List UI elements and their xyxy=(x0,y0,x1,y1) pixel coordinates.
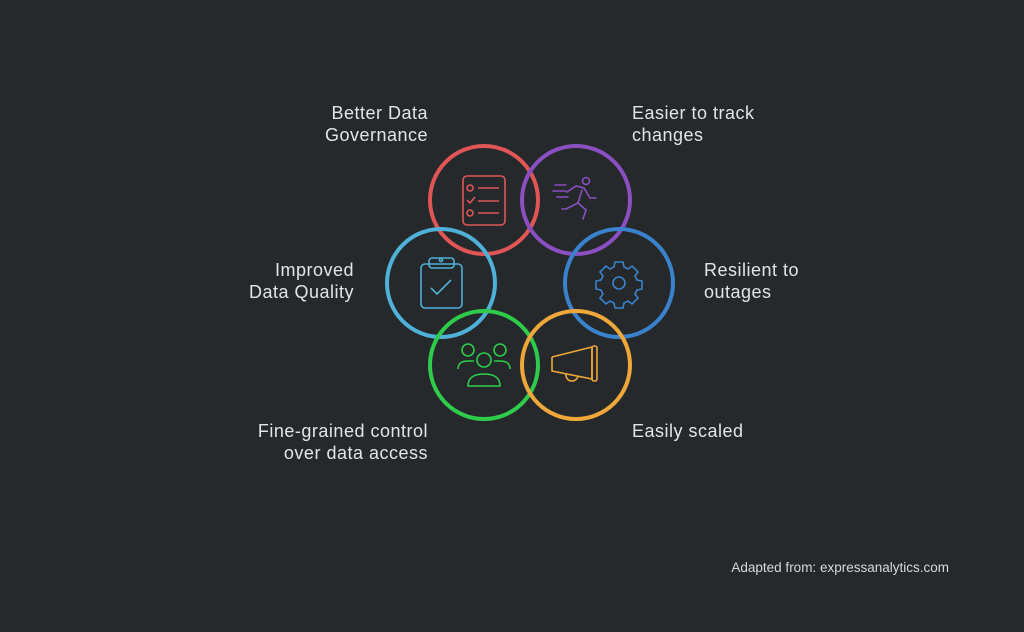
circle: orange Easily scaled xyxy=(522,311,630,419)
icon: clipboard check xyxy=(421,258,462,308)
icon: checklist xyxy=(463,176,505,225)
circle: light blue Improved Data Quality xyxy=(387,229,495,337)
circle: blue Resilient to outages xyxy=(565,229,673,337)
label: Resilient to outages: outages xyxy=(704,282,772,302)
label: Fine-grained control: Fine-grained control xyxy=(258,421,428,441)
circle: green Fine-grained control xyxy=(430,311,538,419)
label: Better Data Governance: Better Data xyxy=(331,103,428,123)
label: Improved Data Quality: Improved xyxy=(275,260,354,280)
label: Resilient to outages: Resilient to xyxy=(704,260,799,280)
label: Easier to track changes: Easier to track xyxy=(632,103,755,123)
label: Fine-grained control: over data access xyxy=(284,443,428,463)
circle: red Better Data Governance xyxy=(430,146,538,254)
icon: megaphone xyxy=(552,346,597,381)
icon: gear xyxy=(596,262,642,308)
source note: Adapted from: expressanalytics.com xyxy=(731,560,949,575)
label: Better Data Governance: Governance xyxy=(325,125,428,145)
icon: people xyxy=(458,344,510,386)
label: Improved Data Quality: Data Quality xyxy=(249,282,354,302)
label: Easily scaled: Easily scaled xyxy=(632,421,744,441)
icon: runner xyxy=(553,178,596,219)
label: Easier to track changes: changes xyxy=(632,125,704,145)
circle: purple Easier to track changes xyxy=(522,146,630,254)
